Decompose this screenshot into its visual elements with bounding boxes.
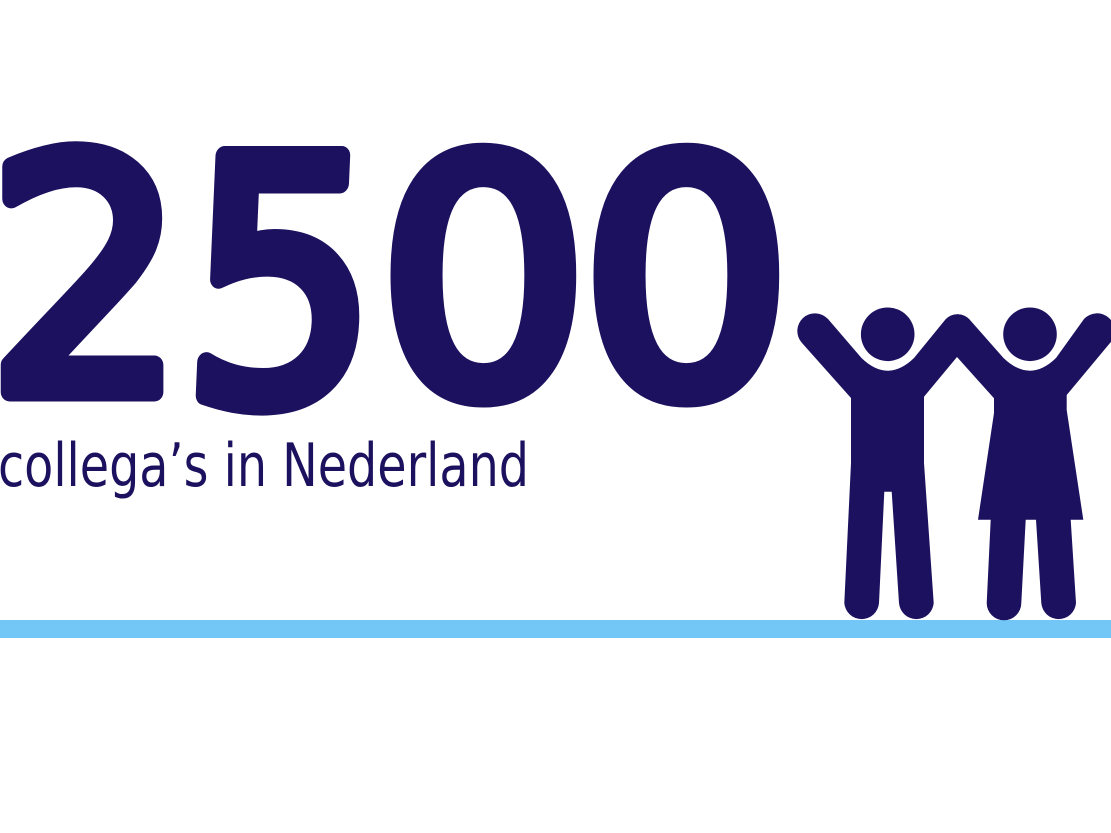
big number 2500: 0: [378, 93, 588, 471]
big number 2500: [0, 90, 791, 481]
ground line: [0, 620, 1111, 638]
big number 2500: 0: [581, 93, 791, 471]
big number 2500: 5: [178, 90, 387, 481]
icon: boy figure with raised arms: [797, 308, 970, 619]
subtitle text: collega’s in Nederland: [0, 431, 529, 501]
icon: girl figure with raised arms: [944, 308, 1111, 620]
